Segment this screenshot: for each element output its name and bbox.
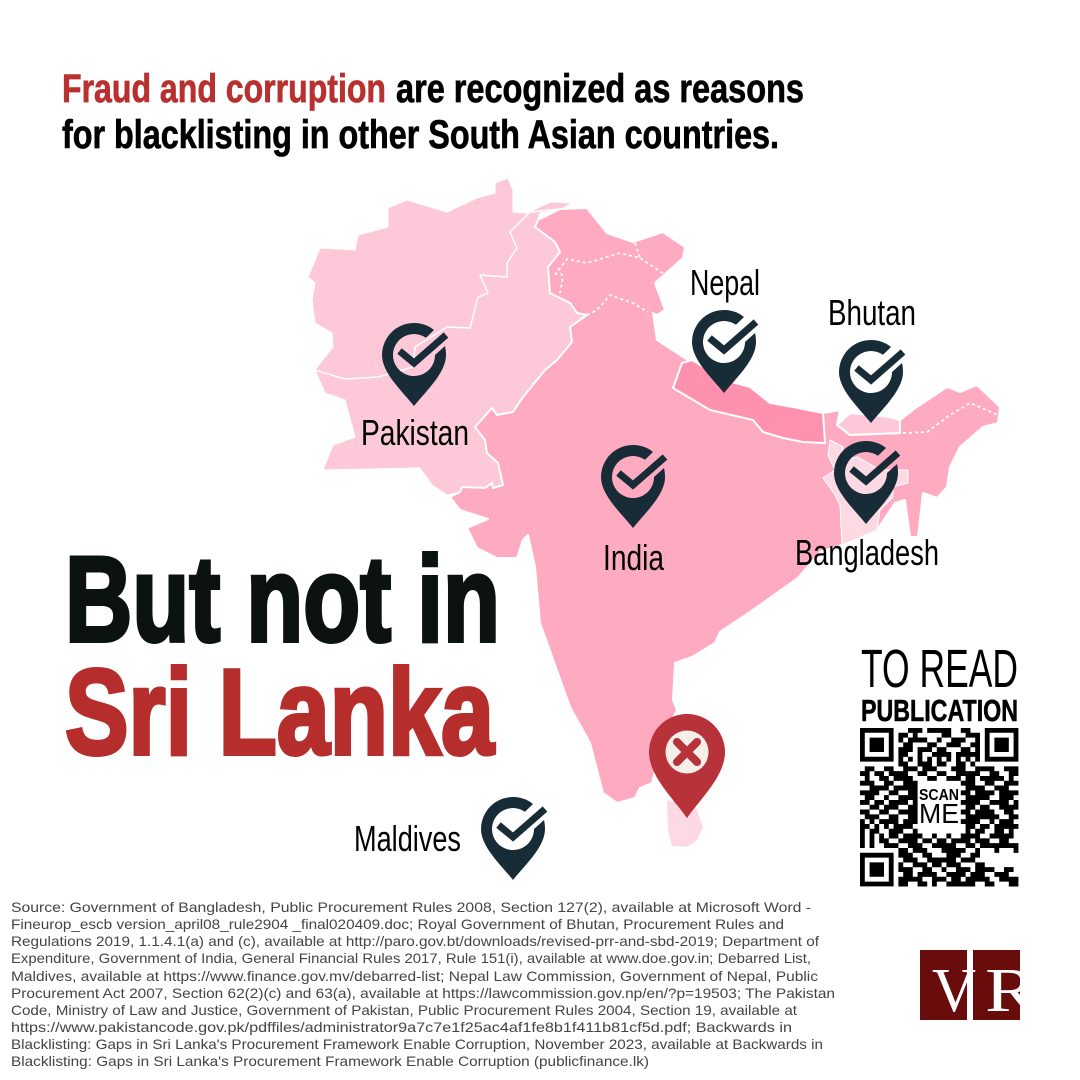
title line 2: for blacklisting in other South Asian countries. bbox=[62, 113, 779, 157]
map: South Asia bbox=[308, 178, 1000, 847]
logo: VR bbox=[920, 950, 1020, 1020]
source text bbox=[11, 900, 835, 1069]
pin: Pakistan bbox=[382, 323, 446, 406]
map region: Bangladesh bbox=[823, 440, 908, 545]
pin: Bhutan bbox=[839, 340, 903, 423]
QR modules bbox=[860, 730, 1018, 884]
source text: Blacklisting: Gaps in Sri Lanka's Procurement Framework Enable Corruption (publicfinance.lk) bbox=[11, 1054, 649, 1069]
title line 1 highlight: Fraud and corruption bbox=[62, 67, 386, 111]
headline bbox=[65, 531, 500, 780]
logo letters: R bbox=[985, 957, 1038, 1025]
source text: Regulations 2019, 1.1.4.1(a) and (c), available at http://paro.gov.bt/downloads/revised-prr-and-sbd-2019; Department of bbox=[11, 934, 819, 949]
pin: Bangladesh bbox=[834, 441, 898, 524]
source text: Procurement Act 2007, Section 62(2)(c) and 63(a), available at https://lawcommission.gov.np/en/?p=19503; The Pakistan bbox=[11, 986, 835, 1001]
QR code bbox=[860, 730, 1018, 884]
logo squares bbox=[920, 950, 1020, 1020]
map region: Bhutan bbox=[837, 413, 900, 435]
label: Bangladesh: Bangladesh bbox=[795, 532, 939, 573]
map region: Sri Lanka bbox=[667, 800, 703, 847]
QR finder patterns bbox=[862, 730, 1016, 884]
logo letters bbox=[932, 970, 1020, 1012]
source text: https://www.pakistancode.gov.pk/pdffiles/administrator9a7c7e1f25ac4af1fe8b1f411b81cf5d.pdf; Backwards in bbox=[11, 1020, 792, 1035]
QR centre label bbox=[919, 787, 959, 829]
label: Maldives: Maldives bbox=[354, 818, 461, 859]
pin: Sri Lanka bbox=[649, 714, 725, 818]
country labels bbox=[354, 262, 939, 859]
source text: Source: Government of Bangladesh, Public Procurement Rules 2008, Section 127(2), available at Microsoft Word - bbox=[11, 900, 811, 915]
pin: Maldives bbox=[481, 797, 545, 880]
pin: India bbox=[601, 445, 665, 528]
logo letters: V bbox=[932, 957, 976, 1025]
map region: Afghanistan and Pakistan bbox=[308, 178, 587, 495]
map borders: disputed dotted lines bbox=[555, 243, 998, 433]
source text: Code, Ministry of Law and Justice, Government of Pakistan, Public Procurement Rules 2004, Section 19, available at bbox=[11, 1003, 797, 1018]
label: Bhutan: Bhutan bbox=[828, 292, 916, 333]
map borders: Afghanistan-Pakistan boundary bbox=[315, 209, 560, 379]
source text: Blacklisting: Gaps in Sri Lanka's Procurement Framework Enable Corruption, November 2023, available at Backwards in bbox=[11, 1037, 823, 1052]
source text: Fineurop_escb version_april08_rule2904 _final020409.doc; Royal Government of Bhutan, Procurement Rules and bbox=[11, 917, 784, 932]
source text: Maldives, available at https://www.finance.gov.mv/debarred-list; Nepal Law Commission, Government of Nepal, Public bbox=[11, 969, 818, 984]
title bbox=[62, 67, 804, 157]
label: India: India bbox=[603, 537, 665, 578]
QR finder centres bbox=[870, 738, 1009, 877]
map region: India bbox=[450, 208, 1000, 803]
QR label: SCAN: SCAN bbox=[919, 787, 959, 804]
call to action line 2: PUBLICATION bbox=[861, 693, 1018, 728]
source text: Expenditure, Government of India, General Financial Rules 2017, Rule 151(i), available at www.doe.gov.in; Debarred List, bbox=[11, 951, 811, 966]
title line 1 rest: are recognized as reasons bbox=[396, 67, 804, 111]
QR label: ME: ME bbox=[919, 798, 959, 829]
label: Pakistan: Pakistan bbox=[361, 412, 469, 453]
map region: Nepal bbox=[673, 360, 825, 443]
pin: Nepal bbox=[692, 310, 756, 393]
headline line 2: Sri Lanka bbox=[65, 644, 495, 780]
call to action: to read publication bbox=[861, 639, 1018, 728]
label: Nepal: Nepal bbox=[690, 262, 760, 303]
headline line 1: But not in bbox=[65, 531, 500, 667]
